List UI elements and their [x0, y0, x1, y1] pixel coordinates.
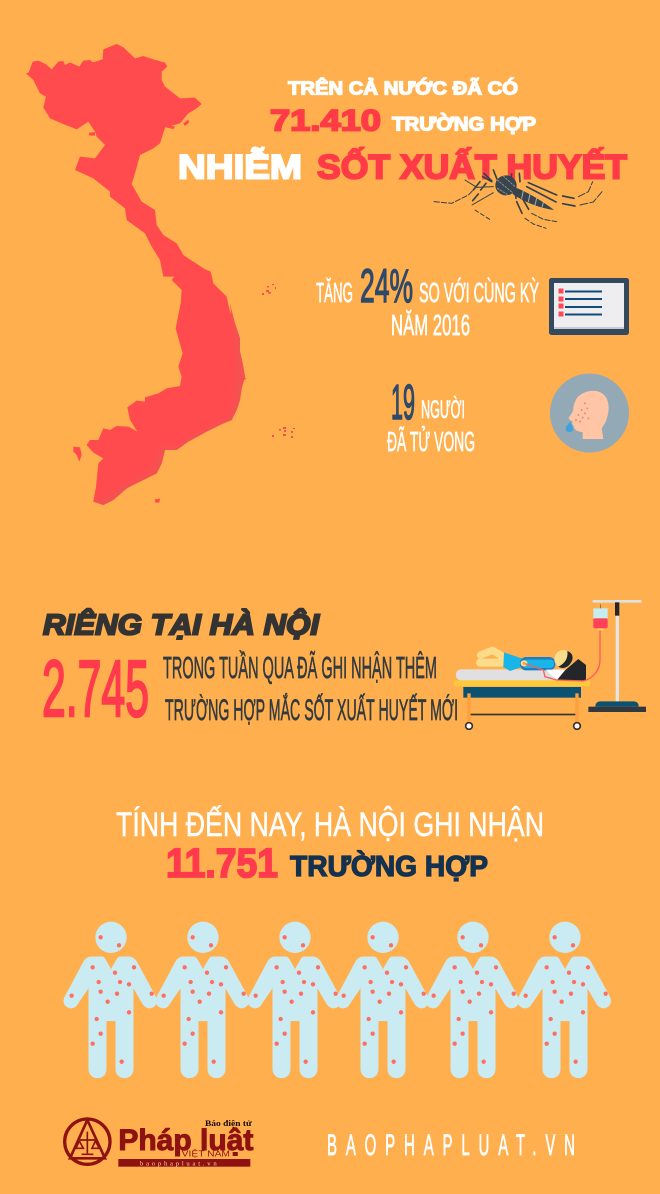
stat: 19 deaths — [387, 376, 475, 457]
map of Vietnam — [26, 44, 247, 505]
stat: 19 deaths: 19 — [391, 376, 415, 430]
heading: Hanoi cumulative total — [116, 806, 544, 886]
heading: national total: NHIỄM — [178, 146, 302, 186]
icon: report card — [549, 278, 629, 335]
islands: Truong Sa — [272, 427, 295, 438]
heading: national total: TRÊN CẢ NƯỚC ĐÃ CÓ — [288, 78, 518, 98]
icon: sick face — [550, 374, 629, 452]
stat: 19 deaths: NGƯỜI — [421, 395, 465, 424]
stat: up 24 percent — [316, 259, 539, 342]
heading: national total: 71.410 — [270, 104, 381, 138]
logo: Phap luat Viet Nam: baophapluat.vn — [140, 1160, 217, 1167]
icon: mosquito — [434, 170, 602, 228]
logo: Phap luat Viet Nam: VIỆT NAM — [182, 1150, 230, 1159]
islands: Hoang Sa — [262, 284, 276, 295]
stat: up 24 percent: NĂM 2016 — [391, 309, 470, 342]
heading: Hanoi cumulative total: TÍNH ĐẾN NAY, HÀ NỘI GHI NHẬN — [116, 806, 544, 844]
stat: 2.745 new cases — [42, 644, 458, 733]
logo: Phap luat Viet Nam — [65, 1119, 254, 1167]
heading: national total: SỐT XUẤT HUYẾT — [317, 146, 627, 186]
heading: Hanoi cumulative total: TRƯỜNG HỢP — [290, 849, 488, 883]
logo: Phap luat Viet Nam: Báo điện tử — [205, 1119, 252, 1128]
heading: Hanoi cumulative total: 11.751 — [166, 840, 278, 886]
heading: Hanoi: RIÊNG TẠI HÀ NỘI — [43, 608, 320, 642]
icon: patient on hospital bed with IV drip — [453, 600, 646, 729]
text: ĐÃ TỬ VONG — [387, 425, 475, 457]
row of six infected people holding hands — [64, 922, 610, 1078]
heading: national total: TRƯỜNG HỢP — [392, 112, 536, 136]
stat: up 24 percent: 24% — [360, 259, 413, 312]
stat: 2.745 new cases: 2.745 — [42, 644, 149, 733]
logo: Phap luat Viet Nam: Pháp luật — [118, 1124, 254, 1157]
heading: national total — [178, 78, 627, 186]
website address: BAOPHAPLUAT.VN — [327, 1130, 575, 1163]
stat: up 24 percent: TĂNG — [316, 277, 353, 308]
stat: up 24 percent: SO VỚI CÙNG KỲ — [419, 277, 539, 308]
